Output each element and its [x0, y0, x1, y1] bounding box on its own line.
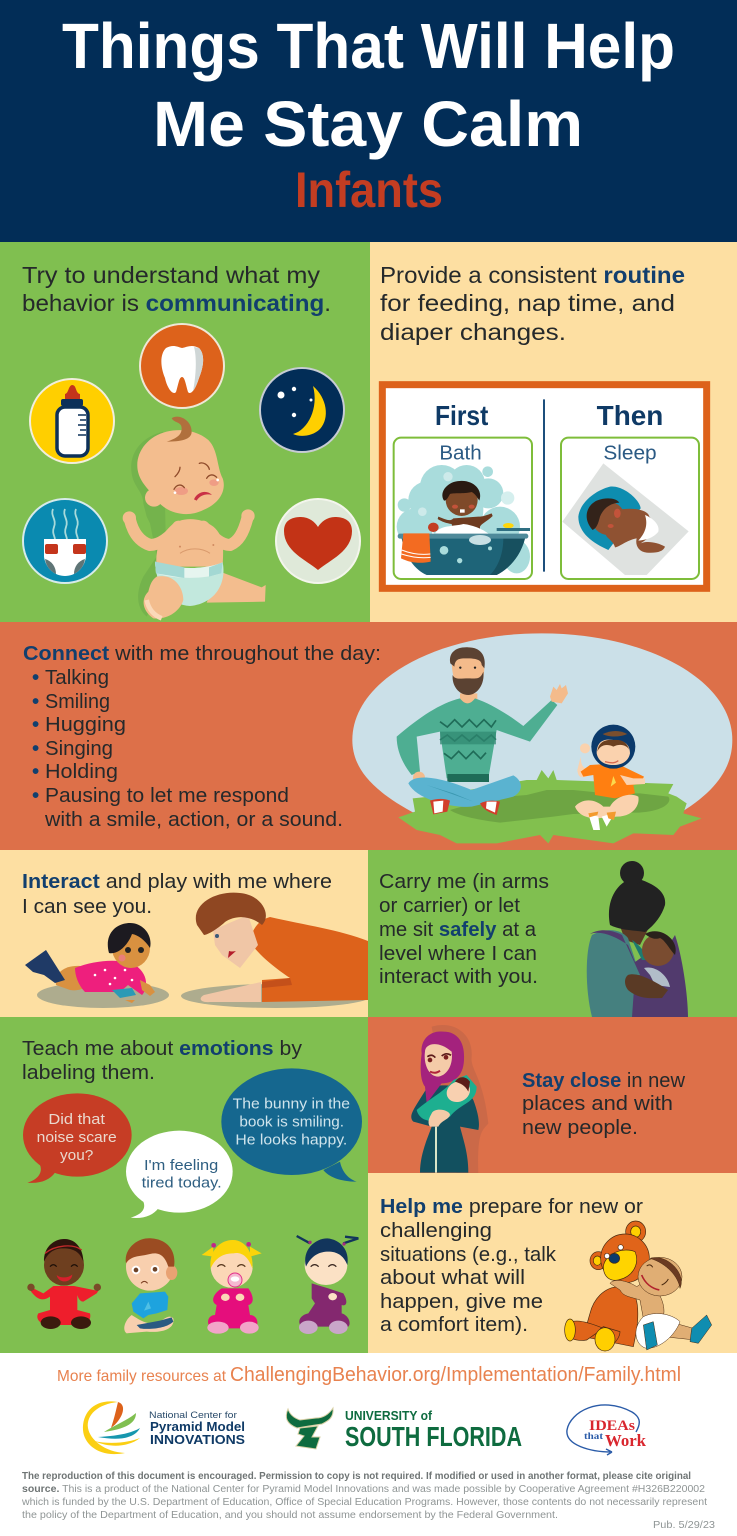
speech bubble: bunny: book is smiling. [239, 1115, 344, 1131]
text: connect list: Hugging [45, 713, 126, 736]
illustration: mother in hijab with baby [411, 1025, 488, 1173]
text: help me [380, 1195, 643, 1336]
logo: National Center for Pyramid Model Innovations: National Center for [149, 1410, 237, 1421]
logo: University of South Florida: SOUTH FLORIDA [345, 1421, 522, 1452]
speech bubble: tired: tired today. [142, 1176, 222, 1192]
text: help me: happen, give me [380, 1290, 543, 1313]
text: routine: for feeding, nap time, and [380, 290, 675, 316]
illustration: woman on floor [181, 893, 371, 1008]
text: connect list: with a smile, action, or a sound. [44, 808, 343, 831]
disclaimer: The reproduction of this document is encouraged. Permission to copy is not required. If modified or used in another format, please cite original [22, 1471, 691, 1482]
text: help me: about what will [380, 1266, 525, 1289]
heading: First: First [435, 400, 488, 431]
sub-element: baby [575, 725, 645, 830]
speech bubble: scare: noise scare [37, 1130, 117, 1146]
logo: IDEAs that Work: Work [605, 1431, 647, 1450]
heading: Then: Then [597, 400, 663, 431]
text: connect list: Singing [45, 737, 113, 760]
resources line: More family resources at [57, 1368, 227, 1385]
text: carry: interact with you. [379, 965, 538, 988]
disclaimer: the policy of the Department of Education, and you should not assume endorsement by the Federal Government. [22, 1510, 558, 1521]
card: bath [394, 438, 532, 579]
panel: emotions [0, 1017, 368, 1353]
logo: National Center for Pyramid Model Innovations: INNOVATIONS [150, 1432, 245, 1447]
text: stay close: Stay close in new [522, 1069, 685, 1092]
disclaimer: source. This is a product of the National Center for Pyramid Model Innovations and was made possible by Cooperative Agreement #H326B220002 [22, 1484, 705, 1495]
illustration: crying baby [123, 417, 266, 619]
speech bubble: scare: Did that [48, 1112, 105, 1128]
speech bubble: scare [23, 1093, 132, 1183]
logo: National Center for Pyramid Model Innovations [83, 1401, 245, 1454]
sub-element: father [397, 647, 568, 815]
text: connect list: Holding [45, 760, 118, 783]
text: connect list: • [32, 666, 39, 689]
icon: moon [260, 368, 344, 452]
illustration: baby hugging teddy bear [565, 1221, 712, 1351]
text: connect list: Pausing to let me respond [45, 784, 289, 807]
text: connect list: • [32, 713, 39, 736]
icon: dirty diaper [23, 499, 107, 583]
illustration: mother with baby carrier [587, 861, 688, 1017]
speech bubble: bunny: He looks happy. [235, 1132, 347, 1148]
card: sleep [561, 438, 699, 579]
sub-element: leg [207, 572, 266, 603]
text: connect list: • [32, 760, 39, 783]
title: Me Stay Calm [153, 88, 583, 160]
sub-element: grass [398, 770, 702, 843]
illustration: crawling baby [25, 923, 169, 1008]
sub-element: head [145, 489, 163, 507]
resources line: ChallengingBehavior.org/Implementation/Family.html [230, 1364, 681, 1386]
baby: sad in blue [124, 1238, 177, 1333]
text: stay close: new people. [522, 1116, 638, 1139]
icon: bottle [30, 379, 114, 463]
title [62, 10, 675, 160]
text: help me: situations (e.g., talk [380, 1243, 557, 1266]
panel: help me [368, 1173, 737, 1353]
logo: National Center for Pyramid Model Innovations: Pyramid Model [150, 1419, 245, 1434]
sub-element: sleeping baby [606, 509, 665, 553]
publication date: Pub. 5/29/23 [653, 1519, 715, 1531]
text: carry: Carry me (in arms [379, 870, 549, 893]
heading: communicating: Try to understand what my [22, 262, 321, 288]
text: routine [380, 262, 685, 345]
sub-element: pillow [578, 487, 641, 550]
speech bubble: bunny [221, 1068, 362, 1182]
first-then board [382, 385, 707, 588]
baby: smiling in purple [297, 1236, 358, 1334]
title: Things That Will Help [62, 10, 675, 82]
sub-element: bathing baby [438, 481, 493, 533]
text: connect list [23, 642, 381, 831]
text: carry: level where I can [379, 942, 537, 965]
speech bubble: scare: you? [60, 1148, 93, 1164]
text: interact [22, 870, 332, 918]
disclaimer [21, 1471, 707, 1521]
text: carry [379, 870, 549, 988]
text: interact: Interact and play with me where [22, 870, 332, 893]
text: emotions: labeling them. [22, 1061, 155, 1084]
speech bubble: bunny: The bunny in the [233, 1097, 350, 1113]
text: help me: a comfort item). [380, 1313, 528, 1336]
speech bubble: tired [126, 1131, 233, 1218]
text: connect list: • [32, 784, 39, 807]
logo: University of South Florida [286, 1408, 522, 1452]
text: connect list: Talking [45, 666, 109, 689]
text: emotions [22, 1037, 303, 1084]
panel: interact [0, 850, 371, 1017]
logo: IDEAs that Work [567, 1405, 647, 1455]
text: stay close [522, 1069, 685, 1139]
logo: IDEAs that Work: that [584, 1431, 603, 1441]
text: connect list: • [32, 690, 39, 713]
speech bubble: tired: I'm feeling [144, 1158, 218, 1174]
panel: stay close [368, 1017, 737, 1173]
icon: heart [276, 499, 360, 583]
card: sleep: Sleep [603, 441, 657, 464]
logo: IDEAs that Work: IDEAs [589, 1418, 635, 1434]
text: interact: I can see you. [22, 895, 152, 918]
text: carry: or carrier) or let [379, 894, 520, 917]
baby: laughing in red [27, 1239, 101, 1329]
sub-element: diaper [155, 562, 224, 606]
text: routine: diaper changes. [380, 319, 566, 345]
text: help me: Help me prepare for new or [380, 1195, 643, 1218]
subtitle: Infants: Infants [295, 162, 443, 218]
panel: connect [0, 622, 737, 850]
text: carry: me sit safely at a [379, 918, 537, 941]
header banner [0, 0, 737, 242]
icon: tooth [140, 324, 224, 408]
panel: carry [368, 850, 737, 1017]
text: connect list: Smiling [45, 690, 110, 713]
heading: communicating: behavior is communicating . [22, 290, 331, 316]
text: routine: Provide a consistent routine [380, 262, 685, 288]
text: help me: challenging [380, 1219, 492, 1242]
disclaimer: which is funded by the U.S. Department of Education, Office of Special Education Programs. However, those contents do not necessarily represent [21, 1497, 707, 1508]
logo: University of South Florida: UNIVERSITY of [345, 1408, 433, 1423]
illustration: father and baby on grass [352, 633, 732, 843]
text: stay close: places and with [522, 1092, 673, 1115]
heading: communicating [22, 262, 331, 316]
sub-element: towel [401, 533, 431, 563]
text: connect list: • [32, 737, 39, 760]
text: emotions: Teach me about emotions by [22, 1037, 303, 1060]
panel: communicating [0, 242, 370, 622]
panel: routine [370, 242, 737, 622]
baby: pacifier in pink [202, 1240, 262, 1334]
text: connect list: Connect with me throughout the day: [23, 642, 381, 665]
card: bath: Bath [439, 441, 482, 464]
sub-element: tub [402, 538, 525, 575]
sub-element: arms [130, 518, 247, 545]
